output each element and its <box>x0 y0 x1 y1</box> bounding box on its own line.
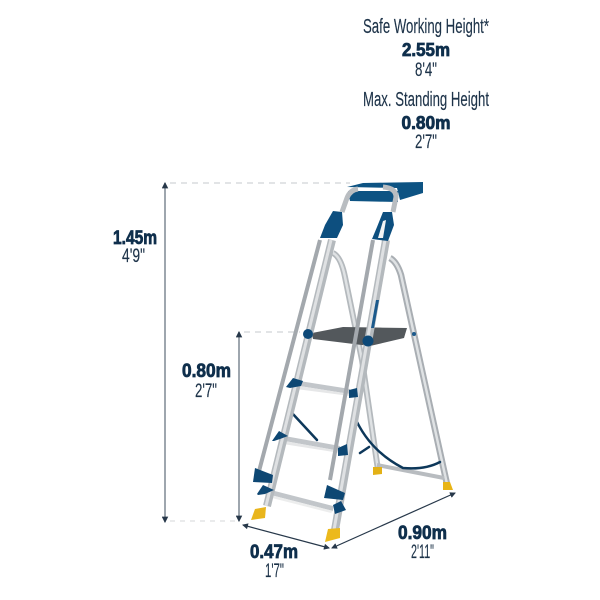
safe working height text <box>363 15 489 81</box>
right handle <box>372 212 394 241</box>
dimension: depth 0.90m <box>332 493 455 563</box>
ladder illustration <box>251 182 453 542</box>
safe working height text: Safe Working Height* <box>363 15 489 38</box>
lock hinge right <box>324 485 345 500</box>
dimension: width 0.47m: 1'7" <box>265 561 284 582</box>
straps <box>292 413 440 468</box>
dimension: depth 0.90m: 0.90m <box>398 522 447 544</box>
safe working height text: 2.55m <box>402 40 450 60</box>
max standing height text <box>363 88 489 153</box>
max standing height text: Max. Standing Height <box>363 88 489 111</box>
steps <box>263 380 350 513</box>
dimension: standing height 0.80m <box>170 332 300 521</box>
left handle <box>320 211 343 238</box>
right stile <box>330 240 386 530</box>
dimension: standing height 0.80m: 2'7" <box>195 381 217 402</box>
dimension: overall height 1.45m <box>113 183 350 522</box>
dimension: width 0.47m <box>243 525 329 582</box>
rear frame left leg <box>333 253 378 470</box>
left stile <box>258 240 332 506</box>
rear feet <box>373 467 382 475</box>
max standing height text: 2'7" <box>415 132 437 153</box>
platform tray <box>347 182 423 202</box>
lock hinge left <box>253 468 273 483</box>
safe working height text: 8'4" <box>415 60 437 81</box>
dimension: overall height 1.45m: 1.45m <box>113 227 157 249</box>
dimension: standing height 0.80m: 0.80m <box>182 360 231 382</box>
rear frame right leg <box>390 258 447 484</box>
platform step <box>312 327 407 346</box>
max standing height text: 0.80m <box>402 113 450 133</box>
dimension: overall height 1.45m: 4'9" <box>122 246 145 267</box>
rear cross bar <box>377 465 444 478</box>
dimension: depth 0.90m: 2'11" <box>411 542 434 563</box>
top hoop rails <box>342 187 396 212</box>
dimension: width 0.47m: 0.47m <box>250 541 298 563</box>
platform pivots <box>303 329 313 339</box>
front feet <box>251 507 266 520</box>
step brackets <box>253 378 358 514</box>
